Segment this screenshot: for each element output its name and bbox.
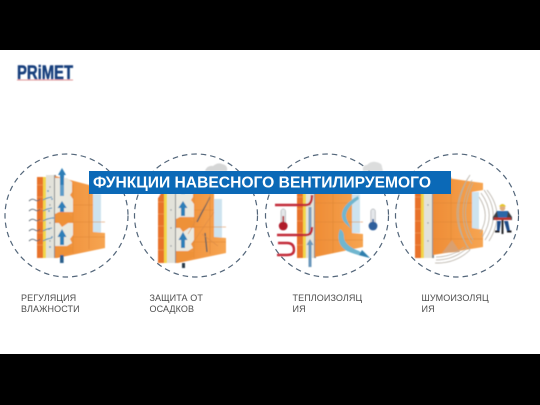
icon: warm thermometer — [279, 209, 288, 230]
illustration: sound insulation wall — [415, 175, 483, 258]
moisture dots — [47, 190, 54, 248]
illustration: moisture regulation wall — [29, 168, 105, 263]
moisture wavy lines — [29, 199, 40, 241]
icon: cold thermometer — [369, 209, 377, 230]
top black bar — [0, 0, 540, 50]
red heat arrows — [275, 195, 312, 255]
sound waves — [435, 175, 497, 263]
icon: cloud over wall 2 — [205, 163, 227, 171]
icon: cloud over wall 3 — [363, 162, 383, 171]
label: sound insulation: ШУМОИЗОЛЯЦ ИЯ — [422, 293, 489, 314]
vertical air arrows — [58, 168, 66, 263]
blue vertical airflow — [308, 207, 312, 235]
logo: PRIMET: PRiMET — [17, 62, 73, 84]
illustration: thermal insulation wall — [275, 175, 370, 267]
label: thermal insulation: ТЕПЛОИЗОЛЯЦ ИЯ — [292, 293, 362, 314]
vertical air arrows — [178, 180, 188, 248]
circle 4 dashed outline — [396, 154, 518, 277]
icon: worker with jackhammer — [493, 204, 512, 234]
label: precipitation protection: ЗАЩИТА ОТ ОСАДКОВ — [150, 293, 203, 314]
illustration: precipitation protection wall — [157, 180, 226, 268]
blue outside airflow swoosh — [342, 196, 359, 229]
banner: title — [89, 171, 451, 194]
circle 2 dashed outline — [134, 154, 258, 277]
circle 1 dashed outline — [5, 154, 128, 277]
label: moisture regulation: РЕГУЛЯЦИЯ ВЛАЖНОСТИ — [21, 293, 80, 314]
banner: title: ФУНКЦИИ НАВЕСНОГО ВЕНТИЛИРУЕМОГО — [93, 174, 431, 192]
bottom black bar — [0, 354, 540, 405]
circle 3 dashed outline — [266, 154, 388, 277]
rain streaks — [197, 197, 210, 252]
